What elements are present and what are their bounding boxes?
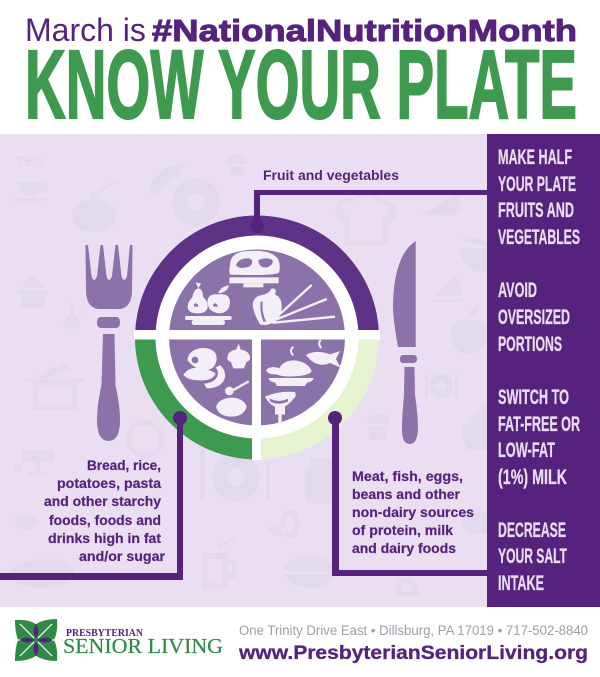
icon: cereal bowl and spoon (216, 381, 249, 417)
vertical divider (252, 339, 261, 460)
label: bread, rice, starchy foods: and other starchy (44, 494, 162, 509)
icon: croissant (149, 164, 185, 196)
label: meat, fish, eggs, dairy: and dairy foods (352, 541, 456, 556)
tip: switch to fat-free or low-fat milk: (1%) MILK (498, 466, 567, 489)
icon: fish (306, 340, 341, 368)
plate rim: light green lower-right (261, 340, 379, 460)
icon: music sign (14, 450, 54, 475)
subtitle: March is: March is (25, 12, 146, 48)
label: bread, rice, starchy foods: and/or sugar (79, 549, 166, 564)
plate rim: green lower-left (135, 340, 252, 460)
tip: make half your plate fruits and vegetables (498, 146, 580, 249)
footer (15, 619, 588, 664)
icon: small knife (267, 462, 270, 500)
label: bread, rice, starchy foods: foods, foods and (49, 513, 161, 528)
icon: music mug (202, 553, 236, 589)
plate rim: purple top half (135, 216, 379, 330)
label: bread, rice, starchy foods (44, 458, 166, 564)
address line: One Trinity Drive East • Dillsburg, PA 17019 • 717-502-8840 (239, 623, 588, 638)
icon: plate with cutlery (425, 374, 458, 398)
icon: jar (305, 458, 339, 504)
website: www.PresbyterianSeniorLiving.org (238, 643, 588, 664)
icon: sugar bowl (72, 181, 116, 232)
icon: pie dish (10, 559, 74, 588)
icon: small dish (14, 515, 38, 530)
connector: meat, fish and dairy (328, 411, 487, 576)
label: meat, fish, eggs, dairy: Meat, fish, eggs, (352, 469, 463, 484)
icon: chef hat (335, 193, 396, 246)
icon: fried egg plate (212, 454, 260, 502)
label: meat, fish, eggs, dairy: non-dairy sources (352, 505, 474, 520)
icon: fork (86, 245, 132, 441)
panel: tips sidebar (487, 134, 600, 607)
icon: donut (172, 178, 220, 226)
logo mark (15, 619, 57, 661)
icon: teapot lower right (462, 508, 487, 534)
icon: salad bowl (458, 237, 487, 272)
icon: pie (432, 276, 462, 302)
icon: bread and croissant (183, 348, 225, 388)
icon: roast chicken (282, 555, 335, 588)
wordmark: Senior Living: SENIOR LIVING (63, 634, 223, 658)
icon: tea cup (13, 153, 48, 201)
label: meat, fish, eggs, dairy: beans and other (352, 487, 461, 502)
tip: avoid oversized portions: AVOID (498, 279, 537, 302)
sidebar background (487, 134, 600, 607)
plate inner purple disc (169, 250, 345, 426)
icon: coffee pot (64, 302, 86, 328)
icon: flask (394, 578, 420, 596)
wordmark: Presbyterian: PRESBYTERIAN (66, 627, 143, 639)
icon: cupcake small (226, 154, 248, 175)
icon: pepper and scallions (253, 285, 335, 325)
tip: decrease your salt intake: INTAKE (498, 572, 544, 595)
label: fruit and vegetables: Fruit and vegetables (263, 167, 399, 183)
icon: knife (393, 241, 418, 444)
label: meat, fish, eggs, dairy (352, 469, 474, 556)
icon: tea cup with lemon (267, 510, 300, 538)
icon: teapot (462, 405, 487, 450)
icon: sausage on fork (265, 392, 296, 425)
label: bread, rice, starchy foods: Bread, rice, (87, 458, 161, 473)
tip: decrease your salt intake (498, 519, 567, 595)
icon: roast chicken and plate (266, 347, 314, 386)
icon: tea cup: TEA (16, 153, 44, 169)
plate food icons (183, 251, 341, 425)
tip: switch to fat-free or low-fat milk (498, 386, 580, 489)
icon: apple (450, 305, 487, 355)
tip: avoid oversized portions (498, 279, 570, 356)
hashtag: #NationalNutritionMonth (152, 13, 577, 48)
icon: small fork (200, 450, 205, 500)
icon: spoon (217, 536, 235, 548)
icon: cupcake (366, 414, 390, 440)
icon: cake slice (422, 191, 460, 215)
label: meat, fish, eggs, dairy: of protein, milk (352, 523, 454, 538)
icon: saucepan (25, 363, 85, 410)
connector: fruit and vegetables (250, 190, 487, 233)
title header (25, 12, 577, 139)
icon: cupcake (227, 344, 250, 368)
label: bread, rice, starchy foods: potatoes, pasta (57, 476, 162, 491)
plate (134, 216, 380, 460)
icon: pear and apple (185, 282, 232, 325)
plate white ring (156, 236, 358, 438)
background food icons (10, 153, 487, 596)
panel: plate background (0, 134, 600, 607)
tip: switch to fat-free or low-fat milk: LOW-FAT (498, 439, 555, 462)
horizontal divider (134, 330, 380, 340)
icon: pot (18, 274, 48, 308)
connector: bread and starchy foods (0, 411, 187, 580)
icon: casserole (229, 251, 280, 287)
logo wordmark (63, 627, 223, 658)
label: bread, rice, starchy foods: drinks high in fat (48, 531, 162, 546)
icon: bowl in circle (126, 420, 164, 458)
